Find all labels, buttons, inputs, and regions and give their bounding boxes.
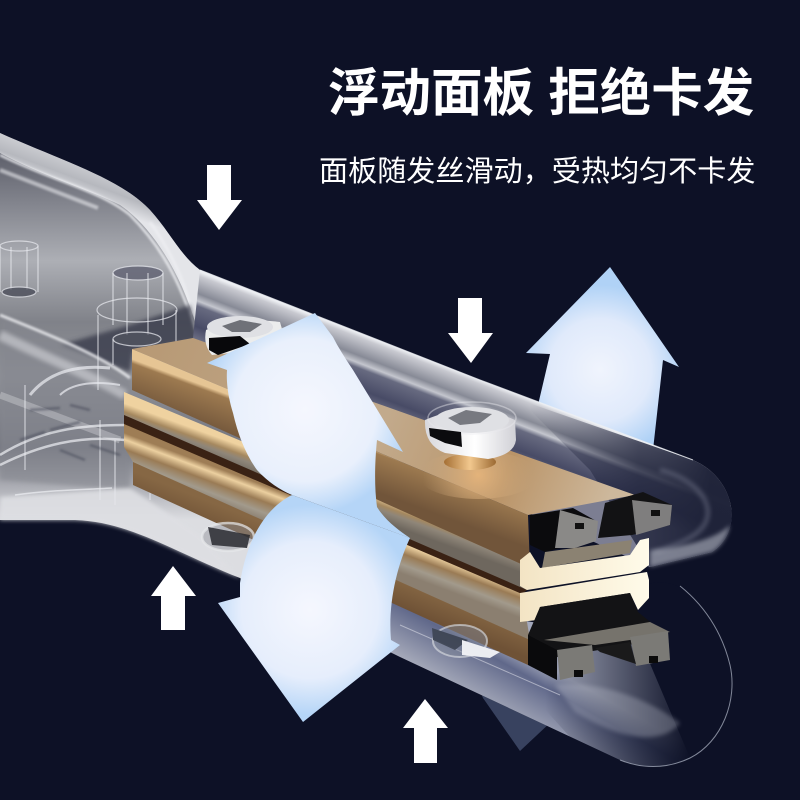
upper cream edge [520,538,649,590]
lower cream edge [520,572,649,622]
lower black heat block [528,593,670,680]
screw: centre right [425,402,516,470]
top face [132,338,635,515]
faint translucent triangle under lower plate [470,630,617,751]
arrow: white up arrow left [151,566,196,630]
arrow: white up arrow bottom [403,699,448,763]
handle bottom light [0,488,240,578]
screw: lower left [202,523,254,551]
lower dark base side [133,460,528,665]
screw: upper left [205,316,285,355]
upper long clear shell [193,270,732,567]
arrow: large blue arrow lower left [218,495,410,722]
left handle clear body [0,133,260,590]
arrow: white down arrow upper [197,165,242,230]
arrow: large blue up arrow right [526,267,679,450]
lower handle shade [0,315,130,490]
screw: bottom centre [432,625,500,658]
upper side [132,349,530,568]
arrow: large blue arrow upper left [207,313,410,538]
gap line [124,414,530,594]
cylinder posts [0,241,177,505]
subtitle: 面板随发丝滑动，受热均匀不卡发 [319,155,755,188]
dark cavity near screw [60,305,198,372]
lower step [124,423,530,640]
arrow: white down arrow middle [448,298,493,363]
gold heating plate assembly [124,338,672,680]
upper black heat block [530,492,672,568]
title: 浮动面板 拒绝卡发 [328,64,754,122]
internal fins and ribs [0,395,125,495]
upper step [124,392,527,590]
lower clear shell [240,520,740,770]
handle upper rim [0,133,214,325]
